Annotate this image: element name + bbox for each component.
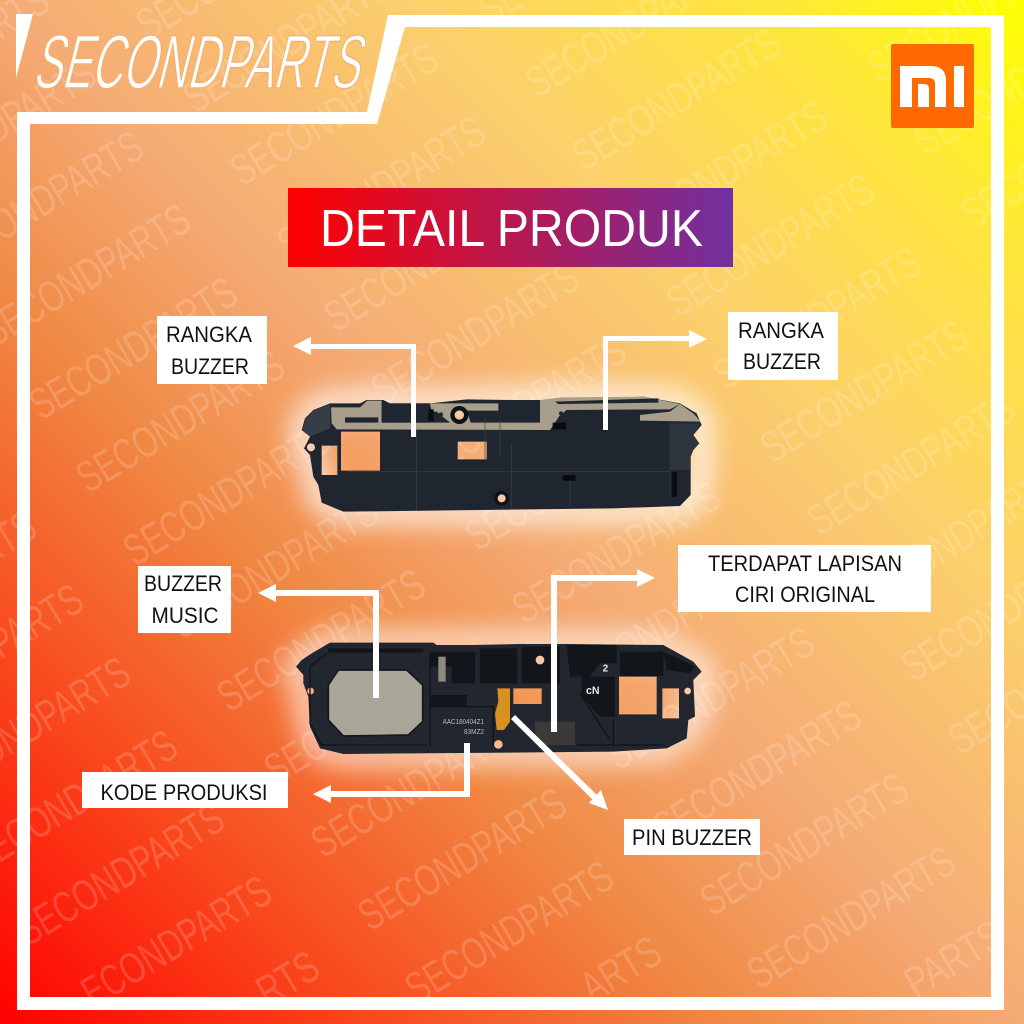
watermark pattern: SECONDPARTS (162, 487, 387, 649)
watermark pattern: SECONDPARTS (410, 326, 635, 488)
watermark pattern: SECONDPARTS (363, 253, 588, 415)
watermark pattern: SECONDPARTS (68, 341, 293, 503)
label: buzzer music: BUZZER (144, 571, 222, 596)
title banner: DETAIL PRODUK (320, 200, 703, 258)
watermark pattern: SECONDPARTS (8, 794, 233, 956)
watermark pattern: SECONDPARTS (316, 180, 541, 342)
title banner (288, 188, 733, 267)
watermark pattern: SECONDPARTS (705, 238, 930, 400)
watermark pattern: SECONDPARTS (611, 92, 836, 254)
label: rangka buzzer left (157, 316, 267, 384)
watermark pattern: SECONDPARTS (551, 545, 776, 707)
dark recesses (328, 645, 695, 683)
label: lapisan ciri original (678, 545, 931, 612)
watermark pattern: SECONDPARTS (115, 414, 340, 576)
product photo: buzzer frame, back: cN (586, 685, 600, 697)
glow behind top part (302, 398, 701, 512)
orange flex pin (495, 688, 510, 730)
watermark pattern: SECONDPARTS (397, 852, 622, 1014)
watermark pattern: SECONDPARTS (350, 779, 575, 941)
watermark pattern: SECONDPARTS (457, 399, 682, 561)
watermark pattern: SECONDPARTS (504, 472, 729, 634)
arrow: buzzer music (258, 584, 379, 698)
molded codes: AAC180404Z1 (443, 717, 484, 726)
product photo: buzzer frame, back (296, 643, 702, 754)
arrow: frame right (603, 330, 707, 430)
watermark pattern: SECONDPARTS (692, 764, 917, 926)
label: buzzer music (138, 566, 231, 633)
arrow: frame left (293, 337, 416, 437)
watermark pattern: ARTS (572, 927, 670, 1013)
speaker plate (328, 670, 423, 736)
watermark pattern: SECONDPARTS (598, 618, 823, 780)
watermark pattern: RTS (248, 942, 328, 1017)
watermark pattern: SECONDPARTS (256, 633, 481, 795)
label: rangka buzzer right: RANGKA (738, 318, 824, 343)
watermark pattern: SECONDPARTS (269, 107, 494, 269)
arrow: original layer (551, 569, 655, 732)
label: buzzer music: MUSIC (152, 603, 219, 628)
screw hole ring (450, 406, 468, 424)
watermark pattern: SECONDPARTS (645, 691, 870, 853)
silver tape strips (331, 397, 680, 430)
watermark pattern: SECONDPARTS (658, 165, 883, 327)
label: pin buzzer: PIN BUZZER (632, 825, 752, 850)
side rims (303, 404, 330, 437)
label: rangka buzzer left: RANGKA (166, 322, 252, 347)
watermark pattern: SECONDPARTS (21, 268, 246, 430)
label: kode produksi: KODE PRODUKSI (100, 780, 268, 805)
product photo: buzzer frame, front (302, 397, 702, 512)
label: rangka buzzer right (728, 312, 838, 380)
mesh pad (535, 722, 575, 745)
watermark pattern: SECONDPARTS (303, 706, 528, 868)
label: lapisan ciri original: TERDAPAT LAPISAN (708, 551, 902, 576)
label: kode produksi (82, 772, 288, 808)
watermark pattern: SECONDPARTS (209, 560, 434, 722)
small hole (536, 656, 544, 664)
watermark pattern: ECONDPARTS (73, 866, 280, 1018)
label: pin buzzer (624, 819, 760, 855)
brand logo text: SECONDPARTS (28, 20, 375, 105)
product photo: buzzer frame, back: 83MZ2 (464, 727, 484, 736)
glow behind bottom part (296, 643, 702, 754)
label: rangka buzzer left: BUZZER (171, 354, 249, 379)
label: lapisan ciri original: CIRI ORIGINAL (735, 582, 875, 607)
icon: Mi logo (891, 44, 974, 128)
arrow: production code (313, 743, 470, 803)
product photo: buzzer frame, back: 2 (603, 664, 609, 675)
arrow: pin (511, 715, 608, 810)
label: rangka buzzer right: BUZZER (743, 349, 821, 374)
